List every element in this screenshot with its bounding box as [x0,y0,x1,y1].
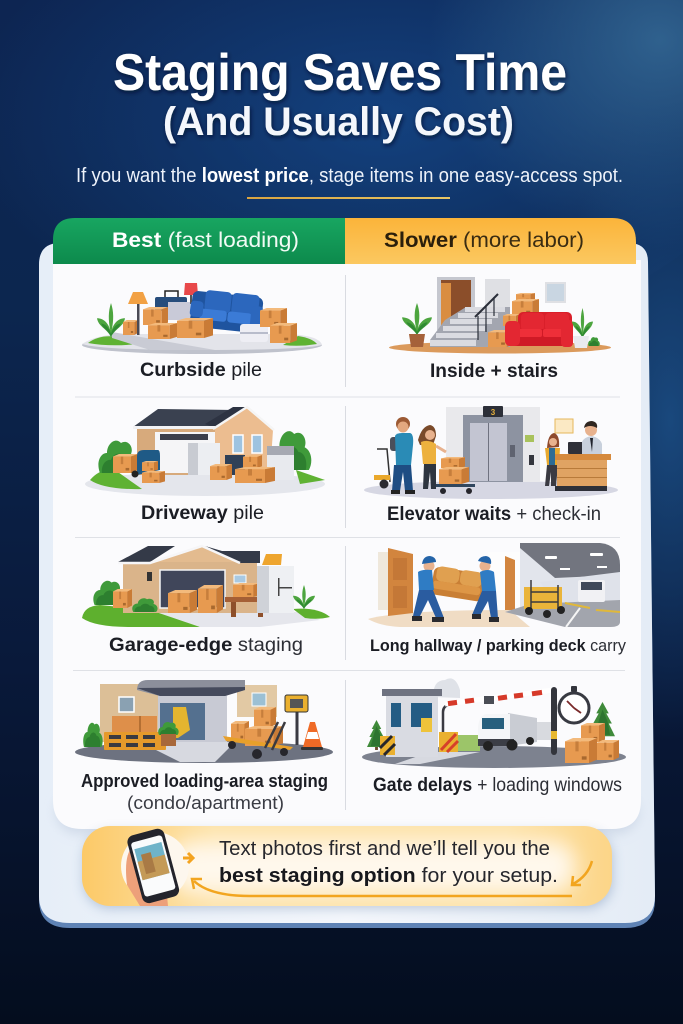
illustration: inside stairs [389,277,611,354]
label: approved loading-area staging: Approved loading-area staging [81,771,328,791]
header: best fast loading: Best (fast loading) [112,229,299,252]
callout pill [82,826,612,908]
item: garage-edge staging [82,546,330,656]
header: slower more labor [345,218,636,264]
header: slower more labor: Slower (more labor) [384,229,584,252]
label: inside + stairs: Inside + stairs [430,361,558,382]
item: inside + stairs [389,277,611,382]
arrow: right curve [572,861,592,885]
row separators [73,396,625,671]
label: condo apartment: (condo/apartment) [127,793,284,813]
illustration: elevator and desk: 3 [491,408,496,417]
item: approved loading-area staging [75,680,333,813]
outer card [39,243,655,928]
item: driveway pile [85,407,325,524]
item: gate delays + loading windows [362,678,626,796]
icon: phone in hand [121,827,193,906]
illustration: loading area [75,680,333,763]
title [113,44,567,144]
illustration: driveway house [85,407,325,496]
illustration: gate and truck [362,678,626,768]
label: gate delays + loading windows: Gate delays + loading windows [373,775,622,796]
title: Staging Saves Time [113,44,567,102]
callout text: Text photos first and we’ll tell you the [219,838,550,860]
item: curbside pile [82,283,322,381]
inner panel shadow [56,790,638,834]
illustration: elevator and desk [364,406,618,499]
illustration: curbside pile [82,283,322,354]
title: (And Usually Cost) [163,100,514,144]
label: long hallway / parking deck carry: Long hallway / parking deck carry [370,636,626,655]
inner white panel [53,260,641,829]
subtitle: If you want the lowest price, stage items in one easy-access spot. [76,165,623,187]
illustration: garage edge [82,546,330,627]
label: elevator waits + check-in: Elevator waits + check-in [387,504,601,525]
label: garage-edge staging: Garage-edge staging [109,635,303,656]
gold divider [247,197,450,199]
callout text [219,838,558,887]
header: best fast loading [53,218,345,264]
illustration: hallway carry [368,543,620,627]
label: curbside pile: Curbside pile [140,360,262,381]
vertical dividers [345,275,346,810]
item: elevator waits + check-in [364,406,618,525]
callout text: best staging option for your setup. [219,865,558,887]
item: long hallway / parking deck carry [368,543,626,655]
label: driveway pile: Driveway pile [141,503,264,524]
arrow: underline curve [192,879,572,896]
